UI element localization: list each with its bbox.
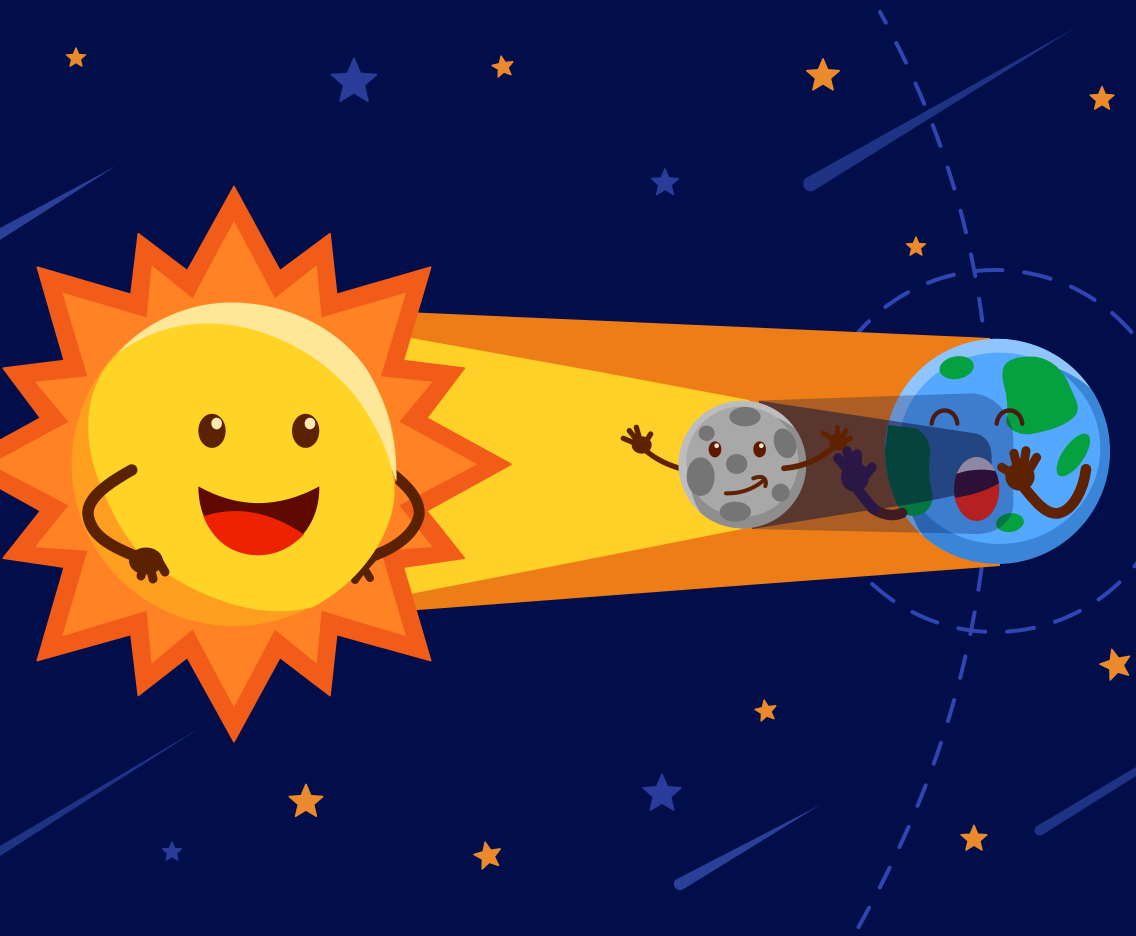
sun right arm behind face [355,472,419,580]
earth right arm [1002,451,1086,513]
earth eyes [932,410,1022,424]
blue stars [162,58,681,860]
earth character [752,338,1110,564]
dashed orbit paths [814,12,1136,928]
shadow penumbra [752,393,1013,534]
earth globe [884,338,1110,564]
moon eyes [709,441,766,457]
moon character [623,401,851,542]
earth mouth [954,457,1000,521]
moon left arm [623,427,682,469]
shadow umbra [752,401,992,529]
sun left arm [88,470,165,579]
moon body [678,400,806,528]
moon right arm [784,427,851,468]
moon smile [726,477,766,493]
sun disc and face [72,302,397,626]
earth continents [885,353,1096,534]
moon craters [687,407,800,522]
sun rays [0,187,511,742]
light beam [400,312,1000,611]
sun character [0,187,511,742]
earth left arm in shadow [838,451,902,515]
